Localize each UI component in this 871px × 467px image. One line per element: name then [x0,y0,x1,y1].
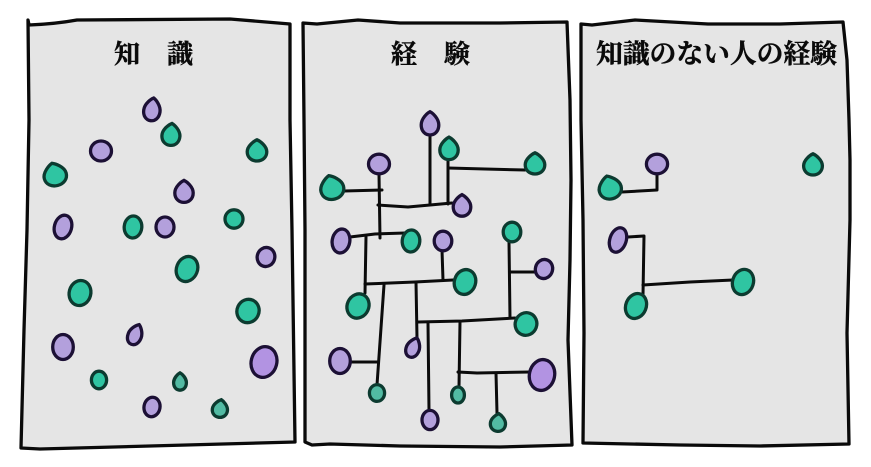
connected experience dots [317,112,558,432]
heading: experience: 経 [391,40,417,69]
heading: experience without knowledge: 知識のない人の経験 [596,39,837,69]
connecting lines [344,133,535,413]
panel frame: experience without knowledge [581,20,850,446]
panel frame: experience [303,20,572,447]
panel frame: knowledge [21,19,295,449]
heading: knowledge: 知 [114,40,140,69]
heading: experience: 験 [443,40,470,69]
panel: experience without knowledge [581,20,850,446]
scattered knowledge dots [41,97,280,418]
heading: knowledge: 識 [167,40,195,69]
sparse experience dots [596,154,822,322]
panel: knowledge [21,19,295,449]
panel: experience [303,20,572,447]
connecting lines [622,173,733,295]
